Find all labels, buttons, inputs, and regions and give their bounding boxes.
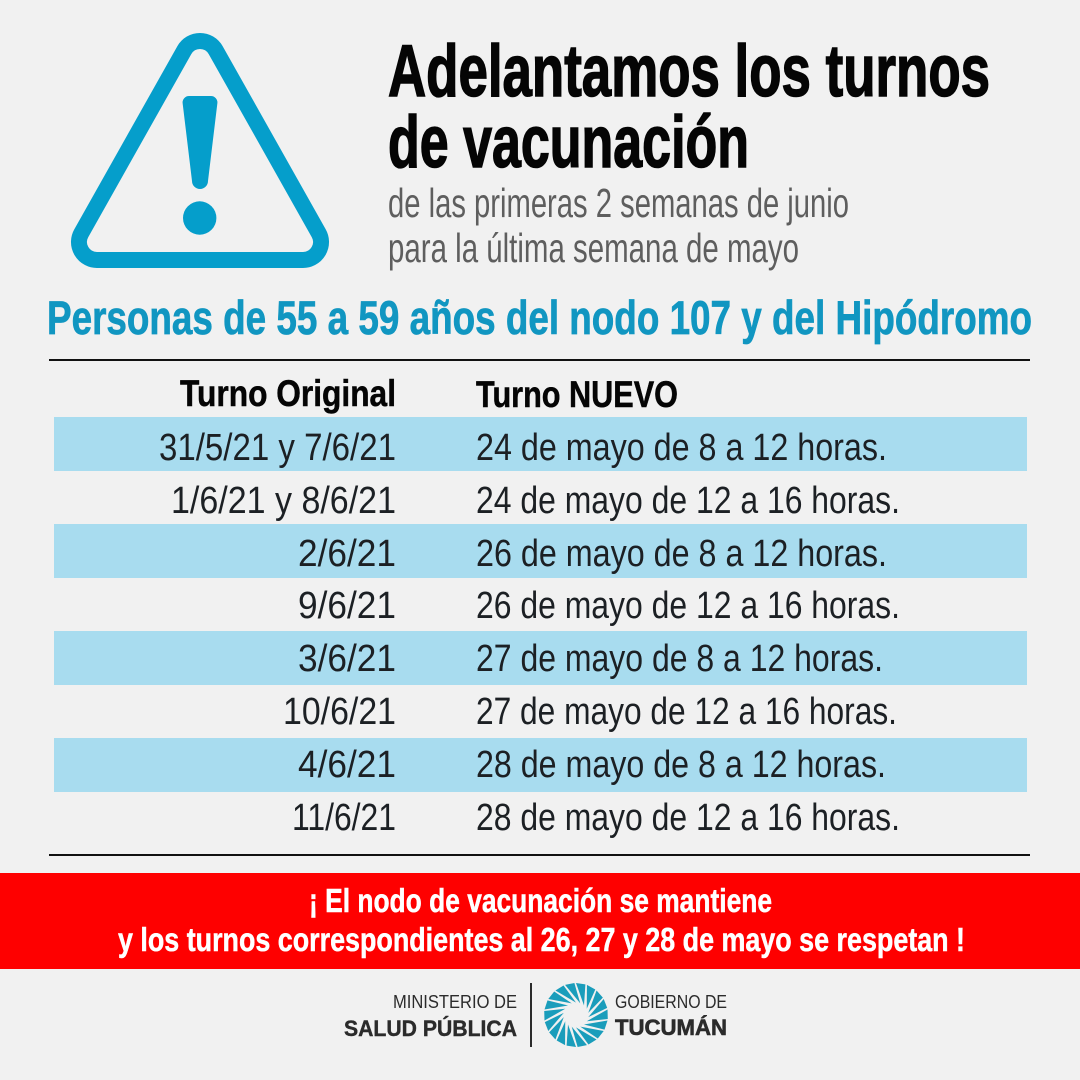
original dates column: 3/6/21 (298, 638, 396, 680)
subtitle: para la última semana de mayo (388, 225, 799, 271)
new dates column: 28 de mayo de 8 a 12 horas. (476, 744, 886, 786)
column header: original: Turno Original (180, 373, 396, 414)
callout: red banner (0, 873, 1080, 969)
original dates column: 10/6/21 (283, 691, 396, 733)
footer: Ministerio de Salud Pública (344, 992, 517, 1041)
original dates column: 9/6/21 (298, 585, 396, 627)
table: appointments (49, 359, 1030, 856)
footer: Ministerio de Salud Pública: SALUD PÚBLICA (344, 1016, 517, 1041)
original dates column (159, 427, 396, 839)
original dates column: 2/6/21 (298, 533, 396, 575)
icon: Gobierno de Tucumán sun logo (543, 982, 609, 1048)
subtitle (388, 180, 849, 271)
new dates column: 28 de mayo de 12 a 16 horas. (476, 797, 900, 839)
icon: warning triangle (79, 41, 321, 260)
subtitle: de las primeras 2 semanas de junio (388, 180, 849, 226)
footer: Gobierno de Tucumán: GOBIERNO DE (615, 992, 727, 1012)
new dates column: 26 de mayo de 12 a 16 horas. (476, 585, 900, 627)
footer: Ministerio de Salud Pública: MINISTERIO DE (393, 992, 517, 1012)
title (388, 31, 990, 183)
new dates column (476, 427, 900, 839)
title: de vacunación (388, 102, 749, 183)
new dates column: 27 de mayo de 8 a 12 horas. (476, 638, 883, 680)
original dates column: 1/6/21 y 8/6/21 (171, 480, 396, 522)
new dates column: 24 de mayo de 8 a 12 horas. (476, 427, 887, 469)
new dates column: 26 de mayo de 8 a 12 horas. (476, 533, 887, 575)
new dates column: 24 de mayo de 12 a 16 horas. (476, 480, 900, 522)
callout: red banner: ¡ El nodo de vacunación se mantiene (309, 882, 772, 919)
column header: new: Turno NUEVO (476, 374, 678, 415)
footer: Gobierno de Tucumán: TUCUMÁN (615, 1015, 727, 1040)
new dates column: 27 de mayo de 12 a 16 horas. (476, 691, 897, 733)
original dates column: 31/5/21 y 7/6/21 (159, 427, 396, 469)
original dates column: 4/6/21 (298, 744, 396, 786)
footer: Gobierno de Tucumán (615, 992, 727, 1040)
original dates column: 11/6/21 (292, 797, 396, 839)
